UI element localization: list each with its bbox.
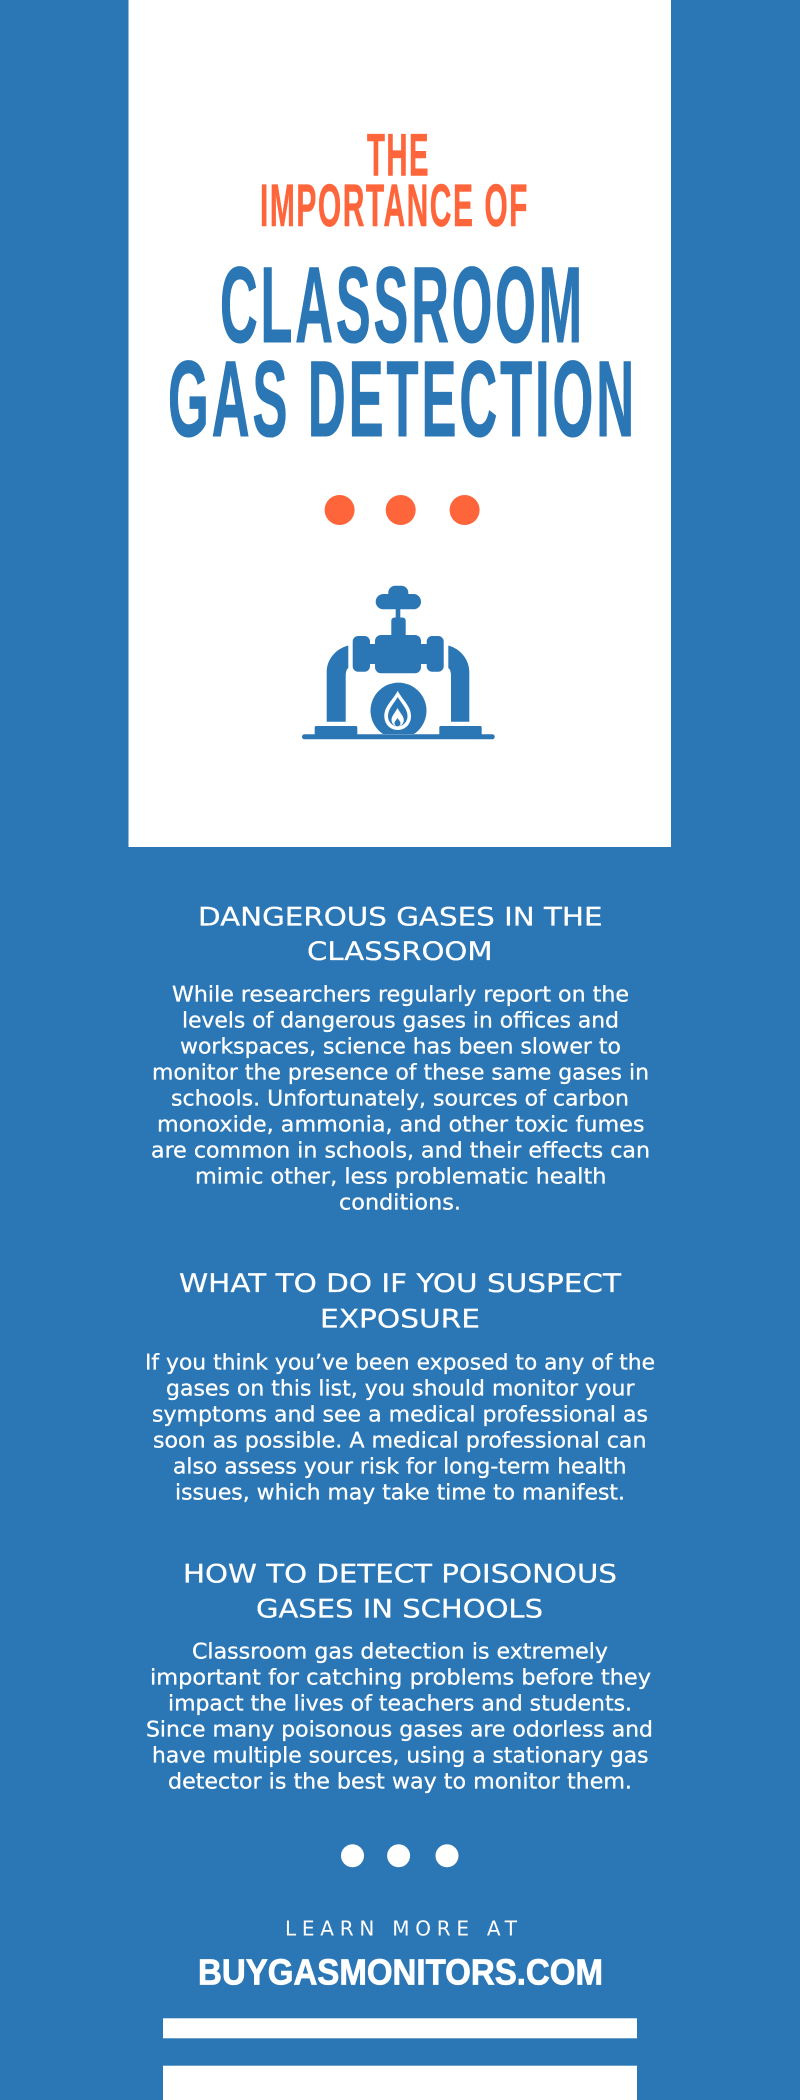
text block: levels of dangerous gases in offices and bbox=[182, 1008, 619, 1033]
section: dangerous gases in the classroom bbox=[151, 902, 650, 1215]
heading bbox=[183, 1559, 617, 1625]
website: BUYGASMONITORS.COM bbox=[198, 1952, 603, 1993]
text block: impact the lives of teachers and students. bbox=[168, 1691, 632, 1716]
orange dots bbox=[325, 495, 480, 525]
text block bbox=[151, 982, 650, 1215]
title line: the importance of: THE bbox=[367, 121, 430, 188]
text block: mimic other, less problematic health bbox=[195, 1164, 606, 1189]
text block: issues, which may take time to manifest. bbox=[175, 1480, 625, 1505]
text block: monitor the presence of these same gases in bbox=[152, 1060, 649, 1085]
title line: the importance of: IMPORTANCE OF bbox=[260, 172, 529, 239]
title bbox=[168, 121, 637, 459]
text block: Classroom gas detection is extremely bbox=[192, 1639, 608, 1664]
text block: also assess your risk for long-term health bbox=[173, 1454, 626, 1479]
text block: symptoms and see a medical professional as bbox=[152, 1402, 648, 1427]
heading: WHAT TO DO IF YOU SUSPECT bbox=[179, 1269, 621, 1299]
heading: DANGEROUS GASES IN THE bbox=[198, 902, 602, 932]
title line: classroom gas detection bbox=[168, 244, 637, 459]
title line: the importance of bbox=[260, 121, 529, 239]
text block: detector is the best way to monitor them. bbox=[168, 1769, 632, 1794]
text block: workspaces, science has been slower to bbox=[180, 1034, 621, 1059]
heading: GASES IN SCHOOLS bbox=[256, 1595, 543, 1625]
heading: HOW TO DETECT POISONOUS bbox=[183, 1559, 617, 1589]
heading bbox=[179, 1269, 621, 1334]
panel: white title panel bbox=[128, 0, 671, 847]
section: what to do if you suspect exposure bbox=[145, 1269, 655, 1505]
heading: EXPOSURE bbox=[320, 1304, 480, 1334]
text block: soon as possible. A medical professional can bbox=[153, 1428, 646, 1453]
text block: conditions. bbox=[339, 1190, 461, 1215]
text block: schools. Unfortunately, sources of carbon bbox=[171, 1086, 629, 1111]
text block: important for catching problems before they bbox=[150, 1665, 651, 1690]
text block bbox=[146, 1639, 653, 1794]
call to action bbox=[198, 1917, 603, 1993]
section: how to detect poisonous gases in schools bbox=[146, 1559, 653, 1794]
learn more label: LEARN MORE AT bbox=[285, 1917, 518, 1941]
text block: Since many poisonous gases are odorless and bbox=[146, 1717, 653, 1742]
text block: While researchers regularly report on the bbox=[172, 982, 629, 1007]
heading: CLASSROOM bbox=[307, 937, 492, 967]
text block: gases on this list, you should monitor your bbox=[166, 1376, 635, 1401]
footer bars bbox=[163, 2018, 637, 2100]
text block: If you think you’ve been exposed to any of the bbox=[145, 1350, 655, 1375]
white dots bbox=[341, 1844, 458, 1867]
heading bbox=[198, 902, 602, 967]
text block: monoxide, ammonia, and other toxic fumes bbox=[157, 1112, 644, 1137]
text block: have multiple sources, using a stationary gas bbox=[152, 1743, 648, 1768]
text block: are common in schools, and their effects can bbox=[151, 1138, 650, 1163]
icon: gas pipe valve with flame bbox=[302, 586, 495, 739]
text block bbox=[145, 1350, 655, 1505]
